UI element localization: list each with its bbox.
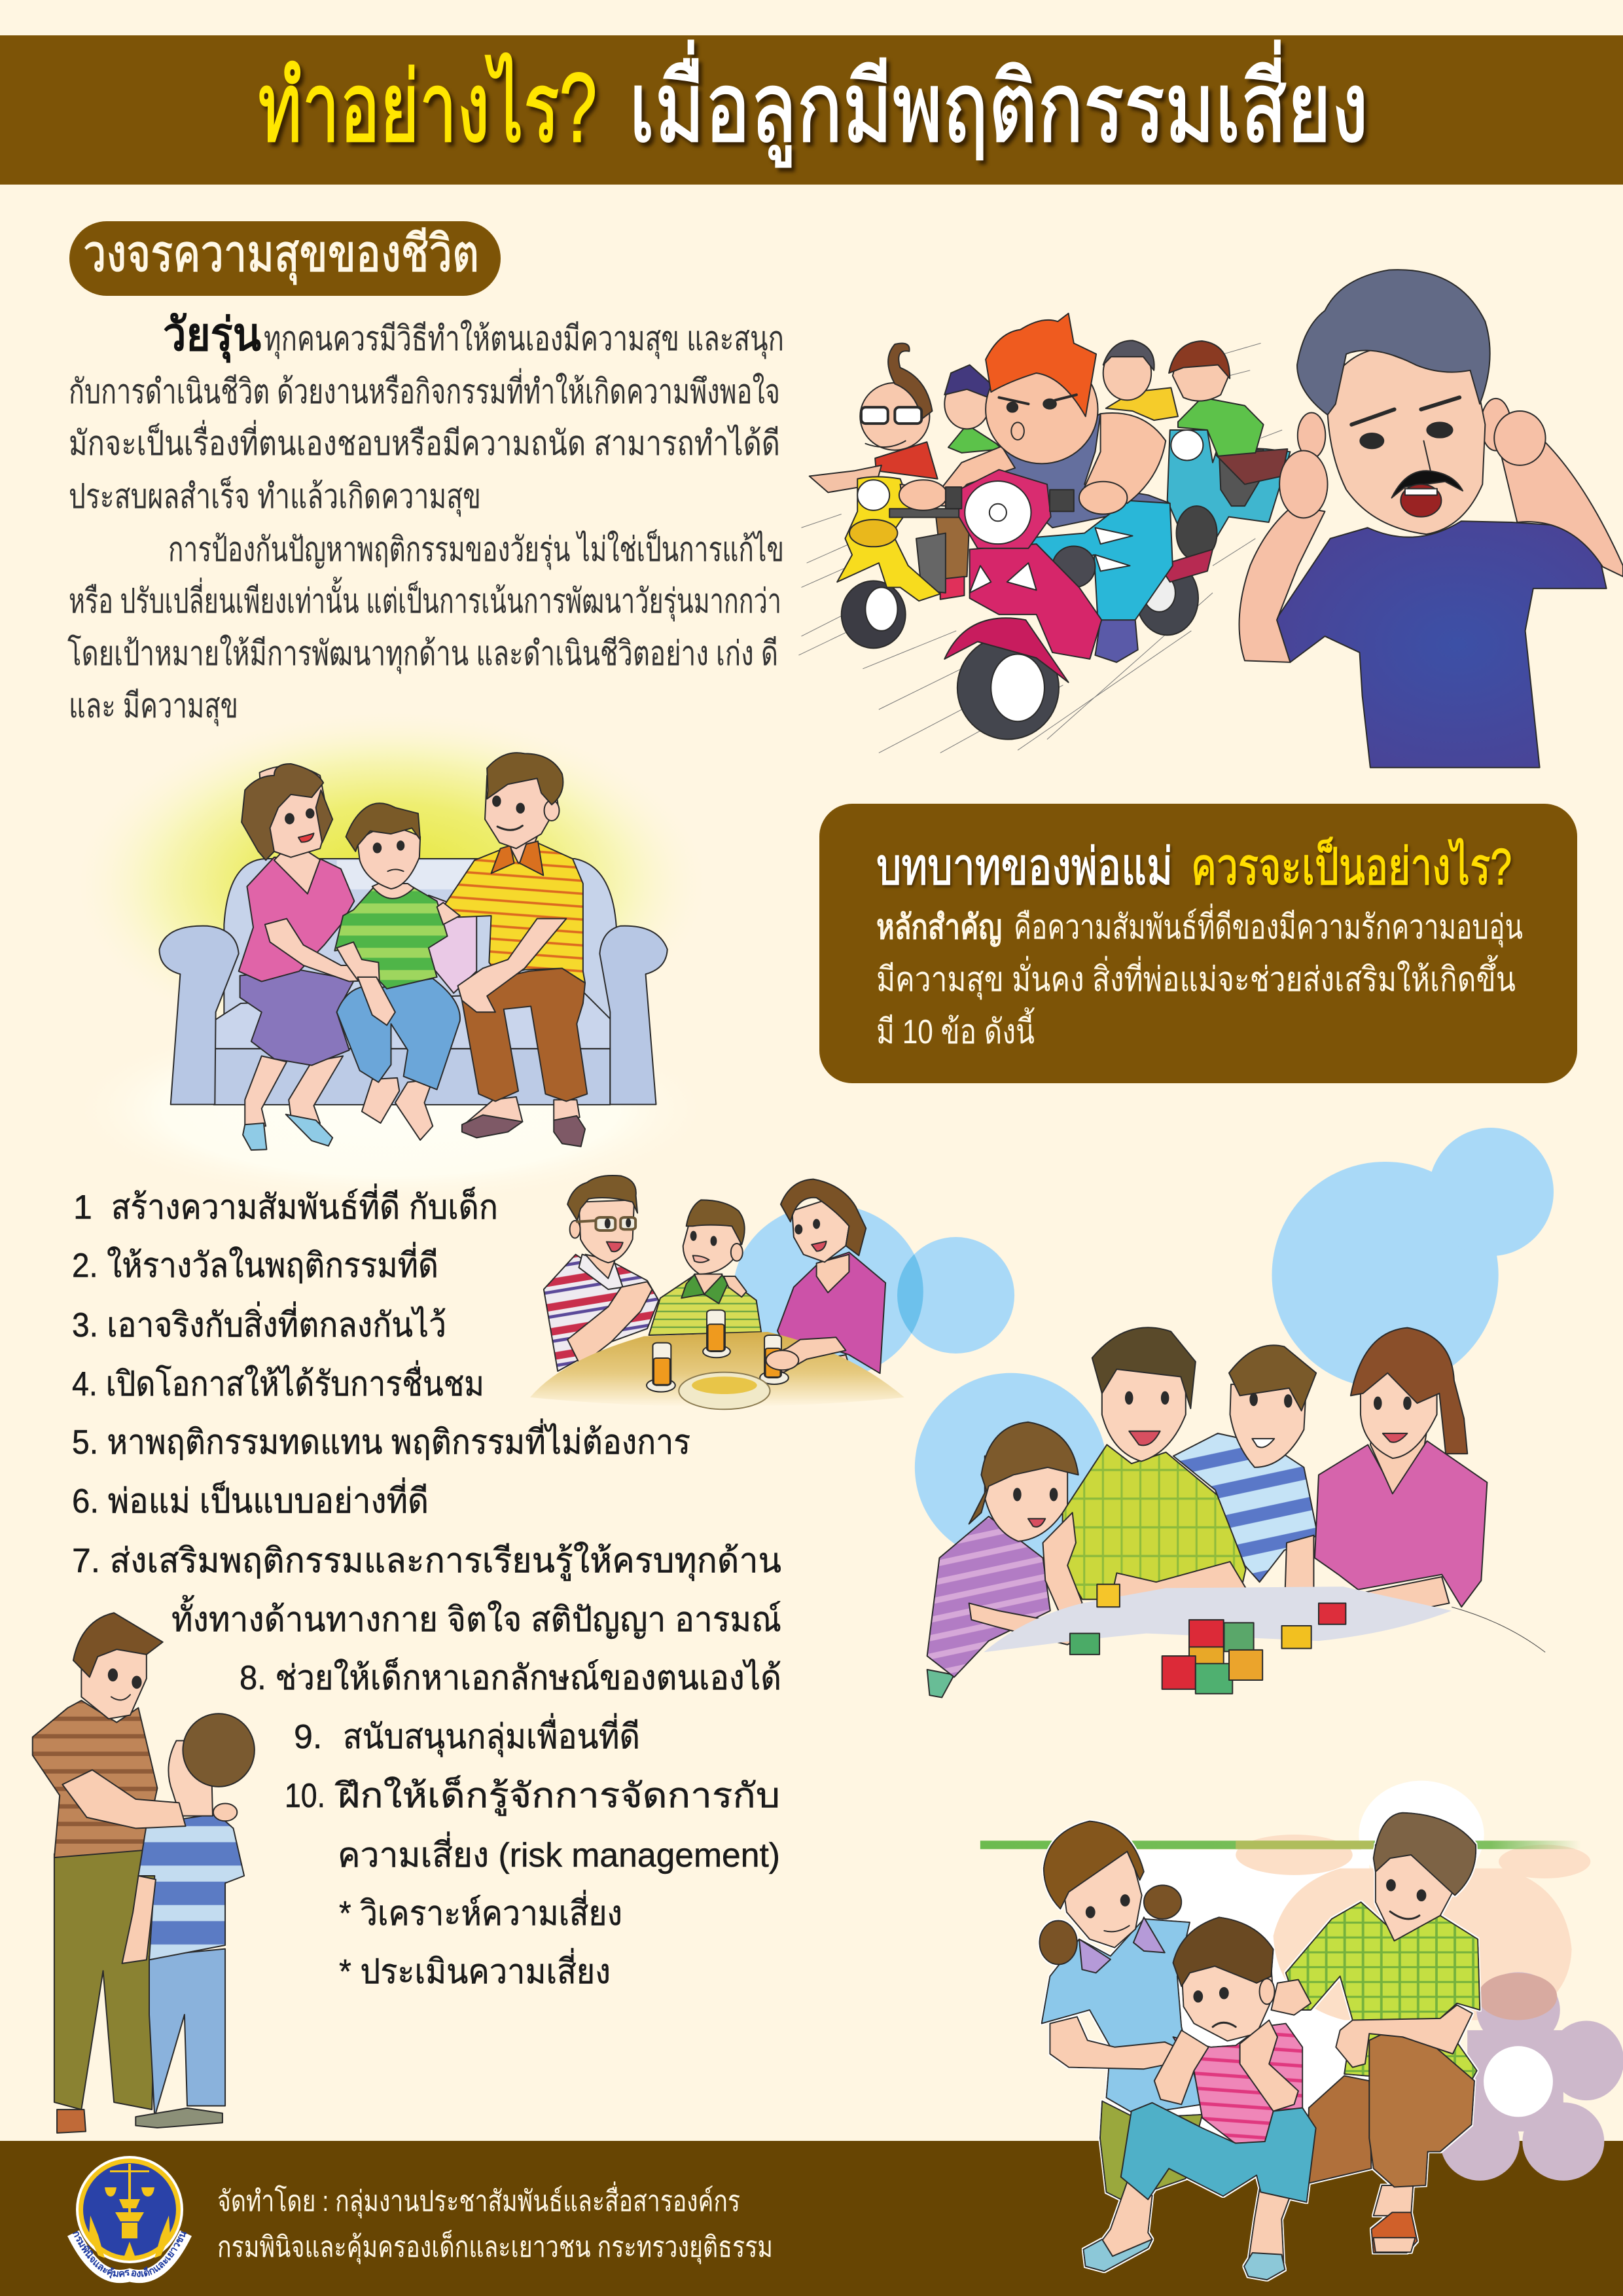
father [437,753,587,1147]
numbered list of ten items: สร้างความสัมพันธ์ที่ดี กับเด็ก [111,1183,498,1227]
numbered list of ten items: * ประเมินความเสี่ยง [339,1948,611,1991]
coloured blocks [1070,1585,1346,1694]
boy [1173,1345,1321,1642]
girl [927,1422,1087,1698]
section heading pill: วงจรความสุขของชีวิต [83,224,479,285]
numbered list of ten items: ฝึกให้เด็กรู้จักการจัดการกับ [334,1776,780,1816]
mother [1315,1328,1487,1617]
numbered list of ten items: 3. เอาจริงกับสิ่งที่ตกลงกันไว้ [72,1301,446,1344]
green line [980,1840,1581,1849]
intro text block: กับการดำเนินชีวิต ด้วยงานหรือกิจกรรมที่ทำให้เกิดความพึงพอใจ [69,368,780,411]
intro text block: ประสบผลสำเร็จ ทำแล้วเกิดความสุข [69,476,481,517]
mother [777,1179,885,1392]
rear riders and bikes [810,340,1290,648]
mother [1039,1821,1202,2200]
intro text block [67,309,784,726]
snack plate [679,1372,770,1409]
illustration: teen motorcycle gang and father covering ears [798,270,1623,768]
numbered list of ten items: 8. ช่วยให้เด็กหาเอกลักษณ์ของตนเองได้ [240,1658,781,1697]
numbered list of ten items: 4. เปิดโอกาสให้ได้รับการชื่นชม [72,1360,484,1403]
intro text block: ทุกคนควรมีวิธีทำให้ตนเองมีความสุข และสนุก [264,319,784,359]
title [258,41,1368,167]
table shade [984,1587,1452,1652]
father [1063,1327,1246,1605]
blue blobs [915,1128,1554,1562]
numbered list of ten items: 2. ให้รางวัลในพฤติกรรมที่ดี [72,1242,438,1285]
numbered list of ten items: * วิเคราะห์ความเสี่ยง [339,1890,622,1933]
footer credit text [217,2181,773,2265]
main rider and pink motorbike [899,314,1213,740]
blue circles [733,1204,1014,1379]
scales emblem [89,2164,170,2259]
illustration: father with hand on son's shoulders [33,1613,255,2133]
numbered list of ten items: ทั้งทางด้านทางกาย จิตใจ สติปัญญา อารมณ์ [171,1595,781,1639]
panel body text: มี 10 ข้อ ดังนี้ [876,1007,1035,1051]
title: เมื่อลูกมีพฤติกรรมเสี่ยง [629,41,1368,167]
numbered list of ten items: 5. หาพฤติกรรมทดแทน พฤติกรรมที่ไม่ต้องการ [72,1418,690,1462]
son figure [122,1713,255,2128]
angry father plugging ears [1240,270,1623,768]
boy [649,1200,761,1335]
panel heading [876,837,1512,895]
footer bar [0,2141,1623,2296]
header banner [0,35,1623,185]
numbered list of ten items [72,1183,781,1991]
numbered list of ten items: สนับสนุนกลุ่มเพื่อนที่ดี [343,1713,640,1757]
drinks [647,1310,798,1392]
intro text block: โดยเป้าหมายให้มีการพัฒนาทุกด้าน และดำเนินชีวิตอย่าง เก่ง ดี [67,634,778,674]
logo: department emblem [67,2156,192,2283]
lilac flower [1440,1972,1623,2181]
illustration: family talking at table with drinks [530,1175,1014,1409]
panel body text: มีความสุข มั่นคง สิ่งที่พ่อแม่จะช่วยส่งเสริมให้เกิดขึ้น [876,955,1516,1000]
numbered list of ten items: 6. พ่อแม่ เป็นแบบอย่างที่ดี [72,1477,429,1520]
father [1271,1813,1480,2253]
illustration: family playing with coloured blocks [915,1128,1554,1698]
father's arm on son's shoulder [62,1770,186,1828]
mother [239,764,380,1150]
father with glasses [544,1175,658,1371]
panel body text: หลักสำคัญ [876,908,1002,947]
numbered list of ten items: ความเสี่ยง (risk management) [338,1831,780,1874]
footer credit text: จัดทำโดย : กลุ่มงานประชาสัมพันธ์และสื่อสารองค์กร [217,2181,740,2219]
section heading pill [69,221,501,296]
logo: department emblem: กรมพินิจและคุ้มครองเด็กและเยาวชน [72,2231,187,2279]
numbered list of ten items: 9. [294,1718,322,1756]
numbered list of ten items: 10. [285,1777,325,1815]
role of parents panel [819,804,1577,1083]
title: ทำอย่างไร? [258,52,597,162]
footer credit text: กรมพินิจและคุ้มครองเด็กและเยาวชน กระทรวงยุติธรรม [217,2230,773,2265]
intro text block: หรือ ปรับเปลี่ยนเพียงเท่านั้น แต่เป็นการเน้นการพัฒนาวัยรุ่นมากกว่า [69,577,781,622]
intro text block: มักจะเป็นเรื่องที่ตนเองชอบหรือมีความถนัด สามารถทำได้ดี [69,420,780,463]
emblem ribbon [73,2233,186,2276]
panel heading: ควรจะเป็นอย่างไร? [1191,837,1512,895]
boy [334,803,460,1140]
intro text block: และ มีความสุข [69,687,238,726]
illustration: family on the sofa [65,708,717,1205]
table with glasses and snack plate [530,1310,904,1409]
worried boy [1083,1917,1316,2280]
numbered list of ten items: 1 [73,1189,92,1227]
intro text block: วัยรุ่น [163,309,261,363]
illustration: worried boy with mother and father [1039,1813,1480,2280]
yellow glow [65,708,717,1205]
sofa [160,859,668,1105]
father figure [33,1613,163,2133]
intro text block: การป้องกันปัญหาพฤติกรรมของวัยรุ่น ไม่ใช่เป็นการแก้ไข [168,529,784,570]
illustration: white backdrop and flowers behind worried family [980,1781,1623,2181]
peach flower [1236,1835,1590,2020]
panel heading: บทบาทของพ่อแม่ [876,838,1173,895]
panel body text [876,903,1523,1051]
speed lines [798,343,1298,753]
numbered list of ten items: 7. ส่งเสริมพฤติกรรมและการเรียนรู้ให้ครบทุกด้าน [72,1541,781,1581]
